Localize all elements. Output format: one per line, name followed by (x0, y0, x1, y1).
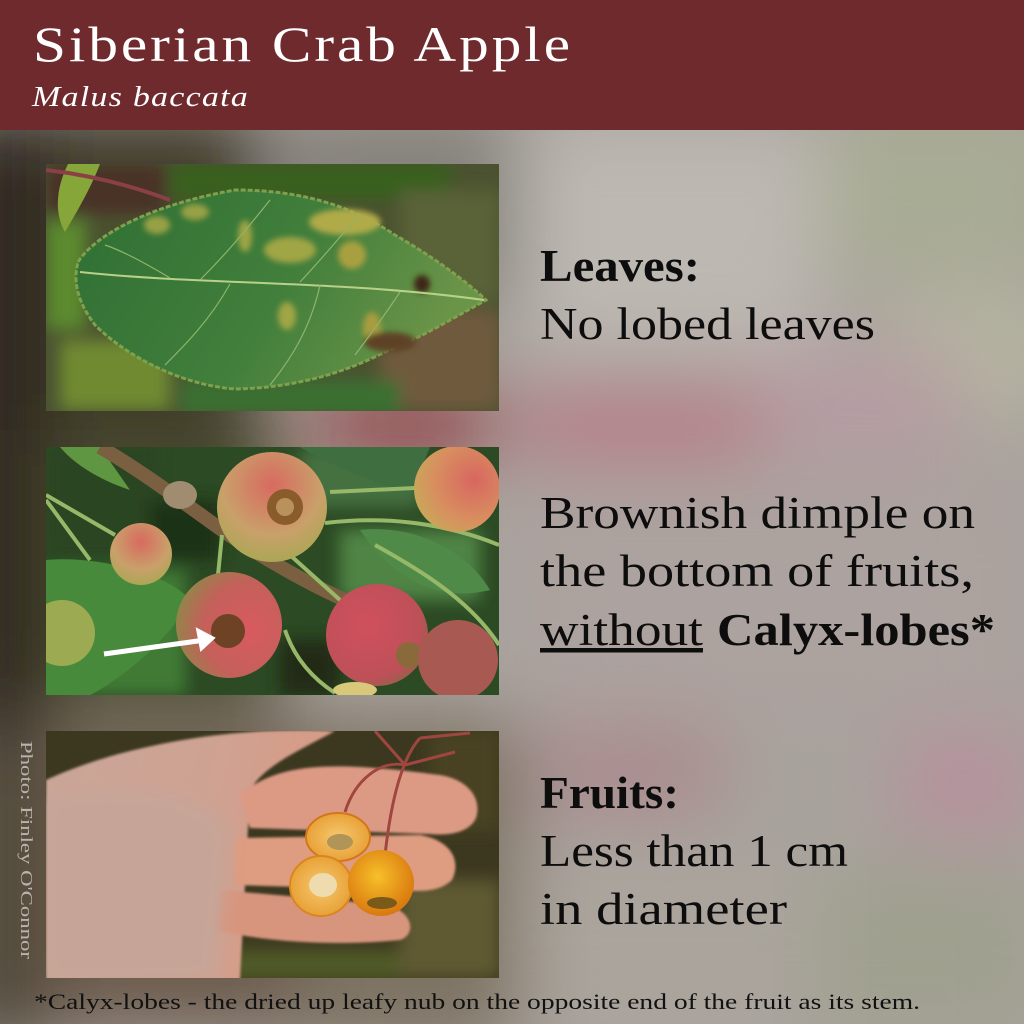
footnote: *Calyx-lobes - the dried up leafy nub on the opposite end of the fruit as its stem. (34, 989, 920, 1014)
stems (46, 488, 499, 693)
branch (100, 447, 345, 600)
caption: dimple: the bottom of fruits, (540, 546, 974, 596)
caption: fruits: Less than 1 cm (540, 826, 848, 876)
caption: dimple (540, 488, 995, 655)
caption: leaves: Leaves: (540, 241, 700, 291)
small leaf top left (58, 164, 100, 232)
stems (345, 731, 470, 855)
leaf blade (76, 190, 486, 389)
title: Siberian Crab Apple (33, 16, 573, 72)
caption: dimple: Calyx-lobes* (717, 605, 995, 655)
photo: leaf (46, 164, 500, 416)
header banner (0, 0, 1024, 130)
caption: leaves: No lobed leaves (540, 299, 875, 349)
caption: dimple: without (540, 605, 704, 655)
photo: hand with fruits (46, 730, 500, 980)
caption: fruits: Fruits: (540, 768, 679, 818)
caption: leaves (540, 241, 875, 349)
arrow (104, 629, 214, 654)
caption: dimple: Brownish dimple on (540, 488, 975, 538)
hand (46, 730, 478, 980)
apples (217, 452, 327, 562)
subtitle: Malus baccata (31, 82, 249, 113)
leaves (300, 447, 430, 478)
photo: fruits with dimple (29, 446, 500, 700)
photo credit: Photo: Finley O'Connor (17, 741, 36, 959)
caption: fruits: in diameter (540, 884, 787, 934)
caption: fruits (540, 768, 848, 934)
fruits (306, 813, 370, 861)
